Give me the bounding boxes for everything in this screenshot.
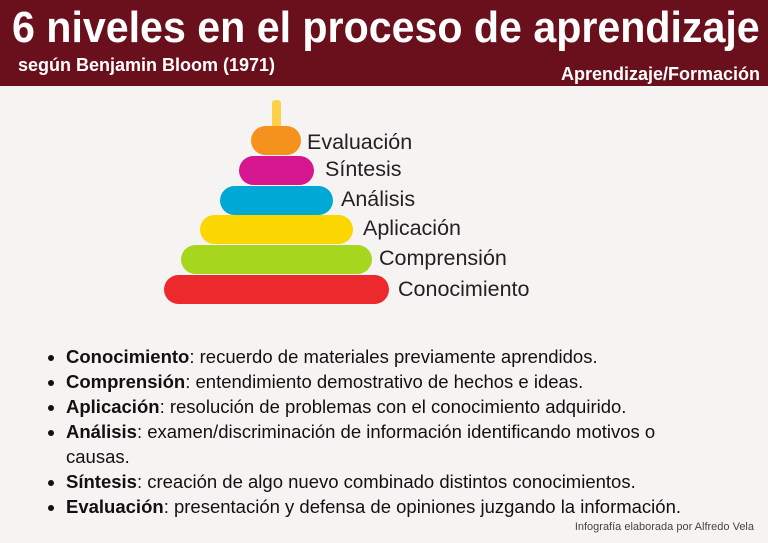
definitions list: Comprensión: entendimiento demostrativo de hechos e ideas. [66,371,583,392]
definitions list: Análisis: examen/discriminación de información identificando motivos o causas. [66,421,655,467]
subtitle: según Benjamin Bloom (1971) [18,55,275,75]
label: Evaluación: Evaluación [307,130,412,154]
category tag: Aprendizaje/Formación [561,64,760,84]
label: Aplicación: Aplicación [363,216,461,240]
header [0,0,768,86]
footer credit: Infografía elaborada por Alfredo Vela [575,521,754,533]
ring: Análisis [220,186,333,215]
label: Análisis: Análisis [341,187,415,211]
pyramid [164,100,529,304]
definitions list [48,346,681,517]
stick [272,100,281,128]
ring: Conocimiento [164,275,389,304]
ring: Comprensión [181,245,372,274]
definitions list: Conocimiento: recuerdo de materiales previamente aprendidos. [66,346,598,367]
ring: Síntesis [239,156,314,185]
title: 6 niveles en el proceso de aprendizaje [12,3,760,52]
label: Comprensión: Comprensión [379,246,507,270]
ring: Aplicación [200,215,353,244]
label: Síntesis: Síntesis [325,157,401,181]
definitions list: Síntesis: creación de algo nuevo combinado distintos conocimientos. [66,471,636,492]
definitions list: Evaluación: presentación y defensa de opiniones juzgando la información. [66,496,681,517]
ring: Evaluación [251,126,301,155]
label: Conocimiento: Conocimiento [398,277,529,301]
definitions list: Aplicación: resolución de problemas con el conocimiento adquirido. [66,396,626,417]
